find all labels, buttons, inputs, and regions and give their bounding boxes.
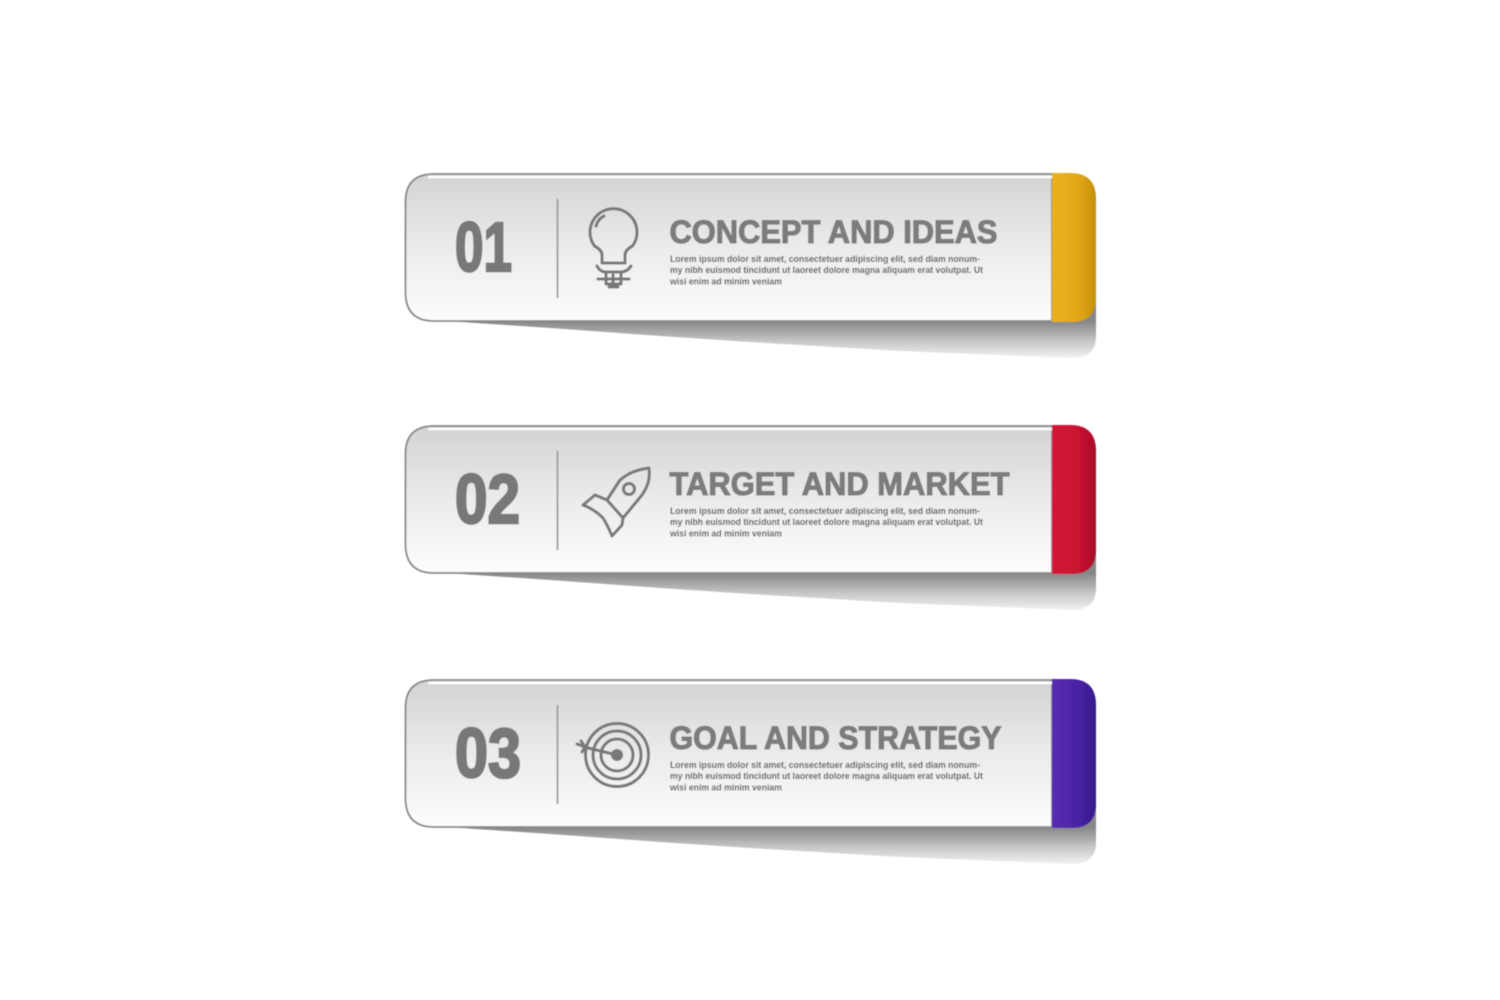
divider — [556, 705, 558, 804]
body text: wisi enim ad minim veniam — [669, 782, 782, 792]
icon: rocket — [583, 468, 649, 536]
colour tab: red — [1052, 425, 1096, 574]
card drop shadow — [432, 806, 1096, 864]
panel: card 02 target and market — [406, 425, 1096, 610]
body text: Lorem ipsum dolor sit amet, consectetuer adipiscing elit, sed diam nonum- — [670, 760, 980, 770]
body text: wisi enim ad minim veniam — [669, 276, 782, 286]
icon: target with arrow — [577, 724, 648, 786]
card drop shadow — [432, 300, 1096, 358]
body text: wisi enim ad minim veniam — [669, 528, 782, 538]
number 01: 01 — [455, 208, 512, 286]
colour tab: indigo — [1052, 679, 1096, 828]
colour tab: gold — [1052, 173, 1096, 322]
white top highlight — [428, 682, 1052, 684]
divider — [556, 199, 558, 298]
body text: Lorem ipsum dolor sit amet, consectetuer adipiscing elit, sed diam nonum- — [670, 506, 980, 516]
heading: CONCEPT AND IDEAS — [670, 214, 998, 250]
card face — [406, 680, 1052, 827]
heading: GOAL AND STRATEGY — [670, 720, 1002, 756]
panel: card 03 goal and strategy — [406, 679, 1096, 864]
card face — [406, 426, 1052, 573]
card face — [406, 174, 1052, 321]
number 03: 03 — [455, 714, 521, 792]
body text: Lorem ipsum dolor sit amet, consectetuer adipiscing elit, sed diam nonum- — [670, 254, 980, 264]
white top highlight — [428, 428, 1052, 430]
body text — [669, 760, 983, 792]
divider — [556, 451, 558, 550]
body text: my nibh euismod tincidunt ut laoreet dolore magna aliquam erat volutpat. Ut — [670, 265, 983, 275]
card drop shadow — [432, 552, 1096, 610]
panel: card 01 concept and ideas — [406, 173, 1096, 358]
number 02: 02 — [455, 460, 520, 538]
heading: TARGET AND MARKET — [670, 466, 1010, 502]
white top highlight — [428, 176, 1052, 178]
body text: my nibh euismod tincidunt ut laoreet dolore magna aliquam erat volutpat. Ut — [670, 771, 983, 781]
icon: light bulb — [590, 209, 637, 287]
body text: my nibh euismod tincidunt ut laoreet dolore magna aliquam erat volutpat. Ut — [670, 517, 983, 527]
body text — [669, 506, 983, 538]
body text — [669, 254, 983, 286]
